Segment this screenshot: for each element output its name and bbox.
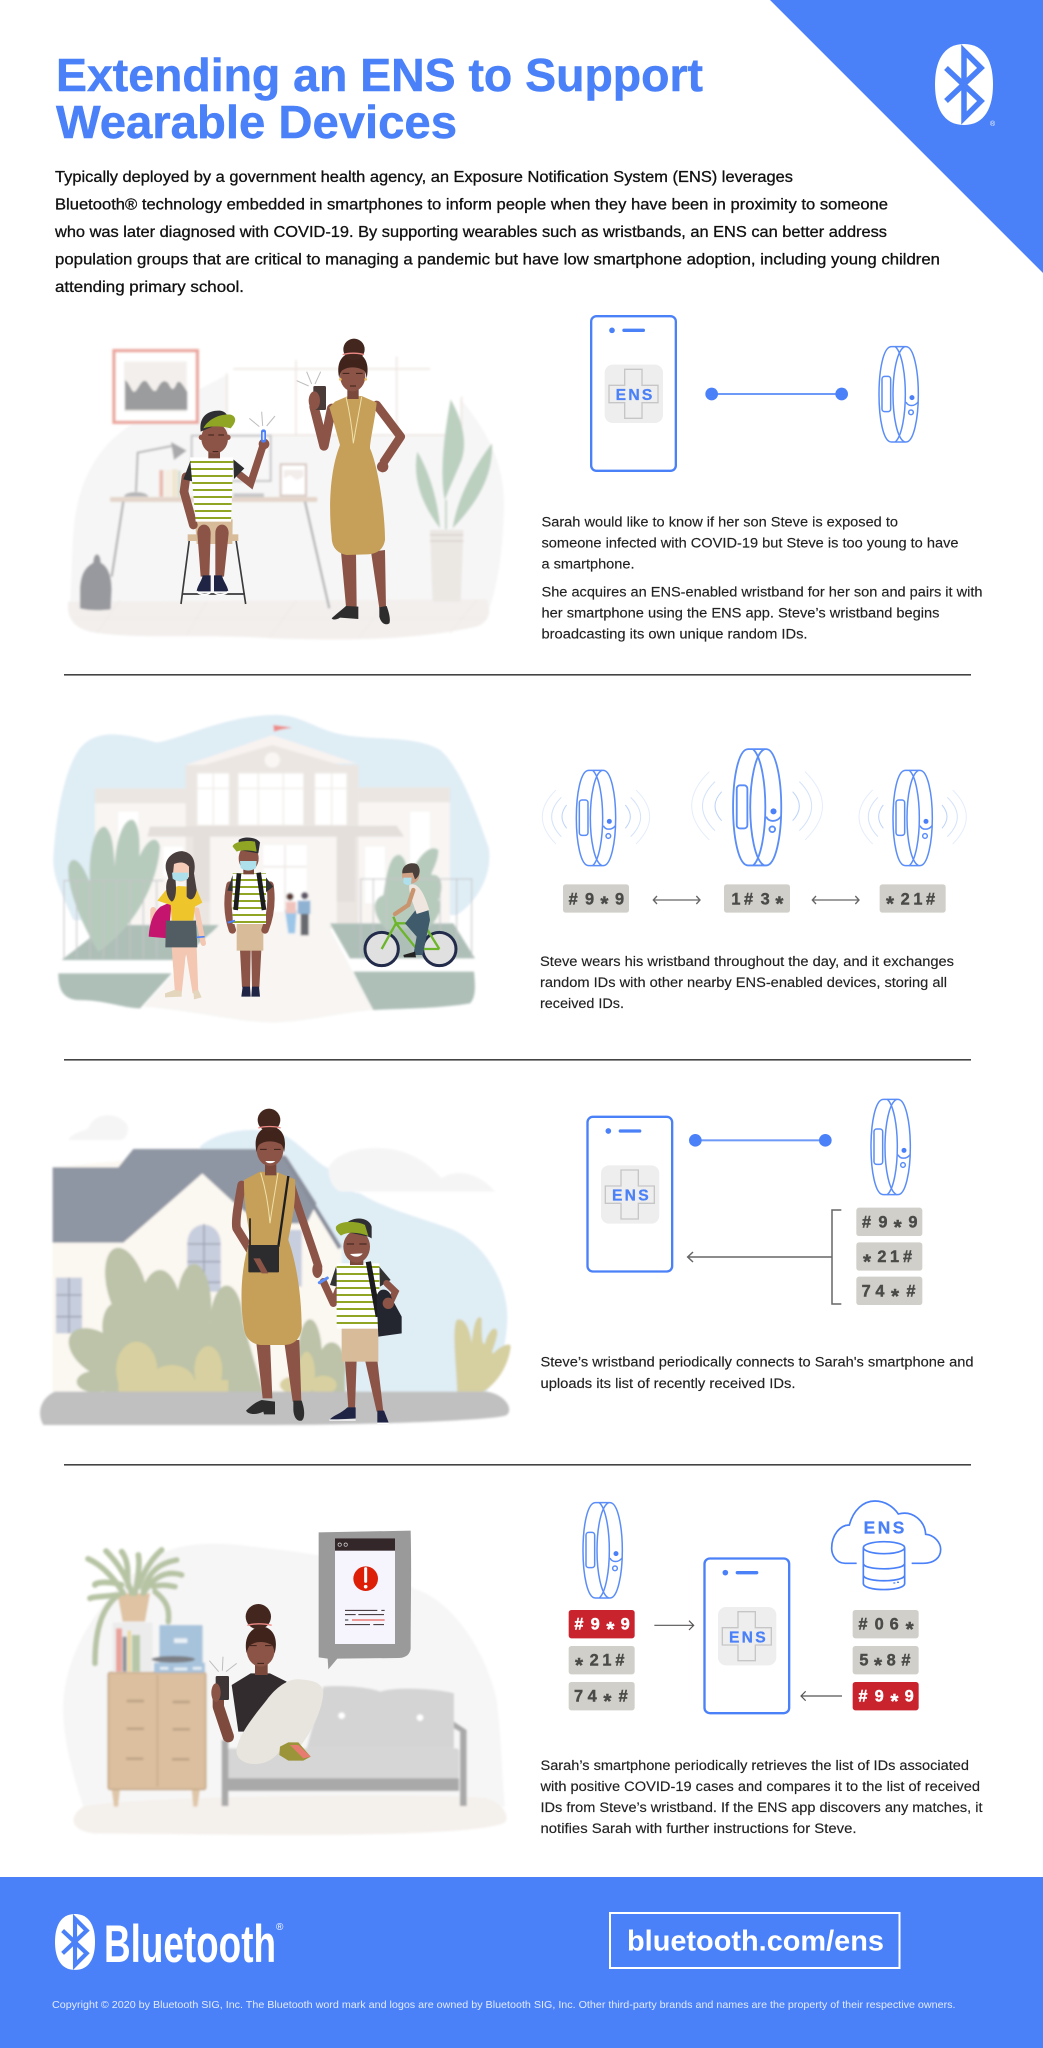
ID chip #06*: # [858,1616,867,1634]
connection line [689,1134,832,1147]
panel: scene 1 diagram, phone paired with wristband [591,316,918,471]
ID chip *21# [569,1646,635,1677]
icon: wristband left [576,770,616,866]
ID chip 5*8#: # [901,1652,910,1670]
ID chip 1#3*: # [744,890,753,908]
text: scene 4 description: notifies Sarah with further instructions for Steve. [540,1821,856,1837]
ID chip #9*9 [856,1208,922,1239]
URL box: bluetooth.com/ens [627,1926,884,1958]
panel: scene 3 diagram, wristband uploads IDs to phone [587,1099,922,1308]
ID chip *21#: 2 [590,1652,599,1670]
text: scene 2 description [540,954,954,1012]
figure: Steve on stool [181,411,275,604]
ID chip #9*9: # [862,1214,871,1232]
ID chip 74*#: * [891,1285,900,1308]
ID chip *21#: 1 [890,1248,899,1266]
ID chip matched #9*9: # [858,1688,867,1706]
ID chip matched #9*9 [853,1682,919,1713]
ID chip 1#3*: * [775,893,784,916]
ID chip *21#: 1 [602,1652,611,1670]
ID chip #9*9 [563,884,629,916]
text: scene 1 description: someone infected with COVID-19 but Steve is too young to have [542,536,959,552]
ID chip 5*8#: 8 [887,1652,896,1670]
ID chip 5*8#: 5 [859,1652,868,1670]
icon: wristband [583,1503,622,1598]
text: scene 1 description [542,514,982,642]
panel: scene 1 illustration, Sarah and Steve at home [68,339,504,639]
footer Bluetooth logo: ® [276,1922,284,1933]
arrow: cloud IDs to phone [801,1691,842,1701]
ID chip #9*9: 9 [908,1214,917,1232]
ID chip *21#: # [615,1652,624,1670]
ID chip 74*#: * [603,1690,612,1713]
ID chip *21#: # [903,1248,912,1266]
icon: cloud database: ENS [864,1518,904,1538]
ID chip *21#: * [863,1250,872,1273]
text: scene 3 description: uploads its list of recently received IDs. [540,1376,796,1392]
text: scene 1 description: broadcasting its own unique random IDs. [542,626,808,642]
connection line [705,388,848,400]
panel: scene 2 diagram, wristbands exchanging IDs [542,749,966,916]
text: scene 4 description: IDs from Steve’s wristband. If the ENS app discovers any matches, it [540,1800,983,1816]
URL box [610,1913,900,1968]
icon: wristband right [893,770,932,866]
figure: Sarah with phone [297,339,401,624]
school background [53,715,489,1023]
text: scene 2 description: received IDs. [540,996,624,1012]
copyright: Copyright © 2020 by Bluetooth SIG, Inc. The Bluetooth word mark and logos are owned by Bluetooth SIG, Inc. Other third-party brands and names are the property of their respective owners. [52,1999,956,2011]
text: scene 2 description: Steve wears his wristband throughout the day, and it exchanges [540,954,954,970]
ID chip #9*9: 9 [878,1214,887,1232]
ID chip matched #9*9: 9 [905,1688,914,1706]
figure: girl with mask [149,851,205,999]
intro paragraph: who was later diagnosed with COVID-19. By supporting wearables such as wristbands, an ENS can better address [54,224,887,241]
ID chip 74*#: 4 [588,1688,597,1706]
living room background [63,1544,506,1835]
ID chip *21#: 1 [913,890,922,908]
intro paragraph: Bluetooth® technology embedded in smartphones to inform people when they have been in proximity to someone [55,196,888,214]
ID chip matched #9*9: * [606,1618,615,1641]
ID chip matched #9*9: 9 [591,1616,600,1634]
ID chip matched #9*9: # [574,1616,583,1634]
footer Bluetooth logo [55,1914,284,1974]
icon: Bluetooth logo [935,44,996,128]
ID chip #9*9: 9 [615,890,624,908]
intro paragraph: population groups that are critical to managing a pandemic but have low smartphone adoption, including young children [55,252,940,268]
ID chip 74*# [569,1682,635,1713]
ID chip 1#3* [724,884,790,916]
ID chip *21# [856,1242,922,1273]
title: Extending an ENS to Support [56,49,703,101]
panel: scene 4 illustration, Sarah on sofa receiving alert [63,1531,506,1835]
panel: scene 2 illustration, school [53,715,489,1023]
title: Wearable Devices [56,96,457,148]
footer panel [0,1877,1043,2048]
ID chip 74*# [856,1277,922,1308]
ID chip 74*#: 7 [574,1688,583,1706]
text: scene 3 description: Steve’s wristband periodically connects to Sarah's smartphone and [540,1354,974,1370]
ID chip #06*: * [906,1618,915,1641]
icon: wristband [871,1099,910,1195]
panel: scene 4 diagram, comparing IDs [569,1501,941,1713]
icon: smartphone with ENS app [704,1558,789,1713]
ID chip #06*: 6 [890,1616,899,1634]
text: scene 1 description: a smartphone. [542,556,634,572]
panel: scene 3 illustration, outside the house [40,1109,511,1425]
icon: wristband centre [733,749,781,865]
ID chip 5*8# [853,1646,919,1677]
house background [40,1115,511,1425]
ID chip #9*9: 9 [585,890,594,908]
figure: Steve with mask [227,837,273,997]
ID chip *21#: * [886,893,895,916]
ID chip 74*#: # [906,1283,915,1301]
ID chip #9*9: * [600,893,609,916]
ID chip matched #9*9 [569,1610,635,1641]
ID chip 74*#: 7 [862,1283,871,1301]
ID chip 5*8#: * [874,1654,883,1677]
ID chip *21#: # [926,890,935,908]
arrow: wristband IDs to phone [654,1621,694,1630]
callout: alert speech bubble [319,1531,411,1669]
ID chip matched #9*9: * [890,1690,899,1713]
text: scene 1 description: She acquires an ENS-enabled wristband for her son and pairs it with [542,584,982,600]
ID chip 1#3*: 1 [731,890,740,908]
icon: smartphone with ENS app [587,1117,672,1271]
icon: Bluetooth logo: ® [990,120,996,128]
text: scene 4 description: Sarah’s smartphone periodically retrieves the list of IDs associated [540,1758,969,1774]
title [56,49,703,148]
text: scene 1 description: Sarah would like to know if her son Steve is exposed to [542,514,898,530]
bracket and arrow [688,1210,841,1304]
text: scene 2 description: random IDs with other nearby ENS-enabled devices, storing all [540,975,947,991]
header corner triangle [770,0,1043,273]
ID chip *21#: 2 [901,890,910,908]
figure: Steve walking [312,1219,402,1423]
ID chip 74*#: 4 [875,1283,884,1301]
intro paragraph: Typically deployed by a government health agency, an Exposure Notification System (ENS) leverages [55,169,793,186]
ID chip *21#: * [575,1654,584,1677]
text: scene 4 description [539,1758,983,1837]
figure: Sarah walking [236,1109,318,1421]
figure: Sarah on sofa [209,1604,323,1764]
arrow: two-way right [812,896,859,904]
ID chip #9*9: * [894,1216,903,1239]
signal waves [542,772,966,844]
ID chip #06* [853,1610,919,1641]
text: scene 3 description [540,1354,974,1392]
ID chip 74*#: # [619,1688,628,1706]
text: scene 1 description: her smartphone using the ENS app. Steve’s wristband begins [542,606,940,622]
icon: cloud database [832,1501,941,1590]
intro paragraph [54,169,940,296]
ID chip *21# [880,884,946,916]
ID chip matched #9*9: 9 [621,1616,630,1634]
ID chip matched #9*9: 9 [875,1688,884,1706]
ID chip #9*9: # [569,890,578,908]
ID chip 1#3*: 3 [761,890,770,908]
intro paragraph: attending primary school. [55,279,244,296]
room background [68,351,504,639]
figure: boy on bicycle [365,863,456,966]
icon: smartphone with ENS app [591,316,676,471]
icon: wristband [879,347,918,442]
ID chip *21#: 2 [877,1248,886,1266]
text: scene 4 description: with positive COVID-19 cases and compares it to the list of received [539,1779,980,1795]
ID chip #06*: 0 [875,1616,884,1634]
arrow: two-way left [653,896,700,904]
footer Bluetooth logo: Bluetooth [104,1915,276,1974]
